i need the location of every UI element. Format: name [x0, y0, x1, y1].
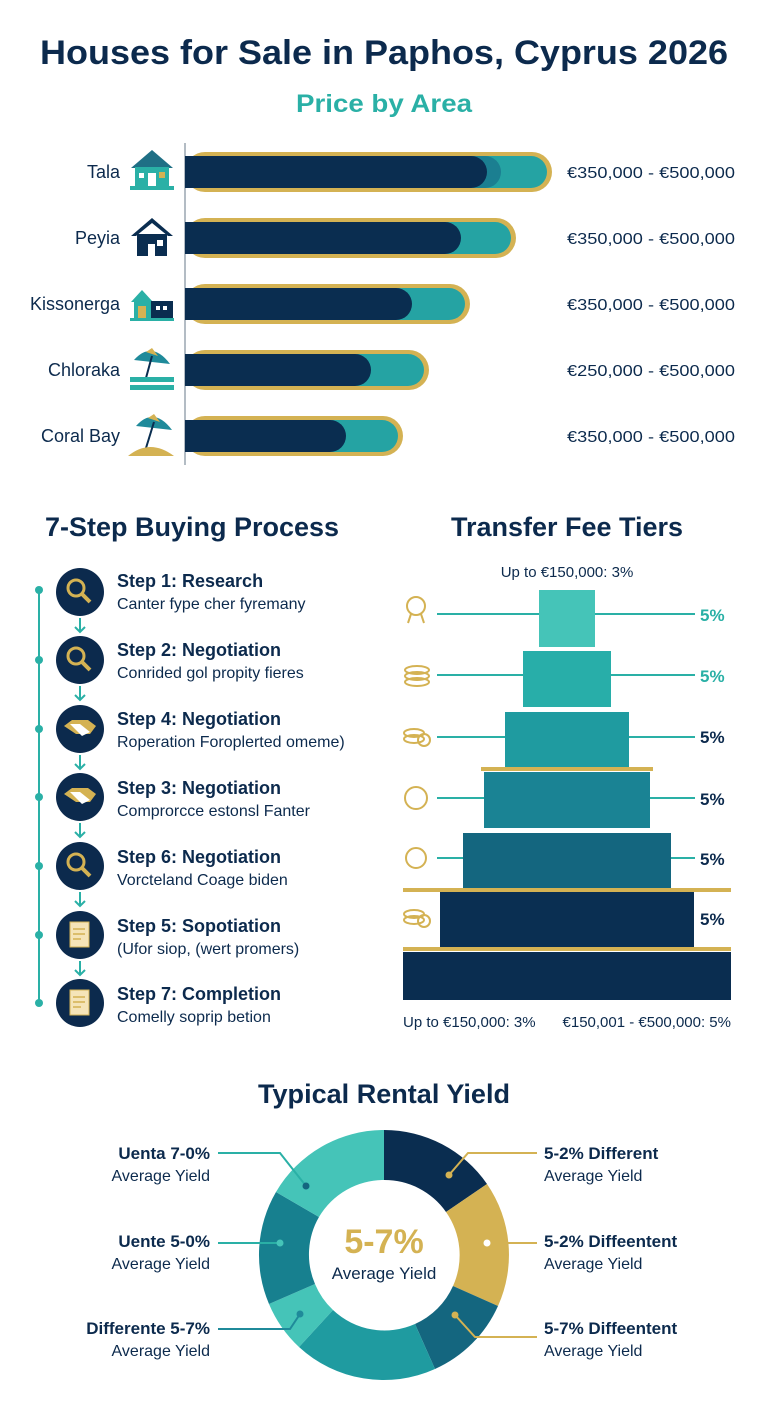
step 2: Conrided gol propity fieres	[117, 665, 304, 682]
heading: typical rental yield: Typical Rental Yield	[258, 1079, 510, 1109]
callouts: yield labels: Uente 5-0%	[118, 1232, 210, 1251]
title: Houses for Sale in Paphos, Cyprus 2026	[40, 34, 728, 72]
panel: transfer fee pyramid	[403, 564, 731, 1031]
callouts: yield labels: Average Yield	[544, 1168, 642, 1185]
bar: Peyia: €350,000 - €500,000	[567, 231, 735, 248]
panel: transfer fee pyramid: 5%	[700, 728, 725, 747]
step 3: Comprorcce estonsl Fanter	[117, 803, 311, 820]
step 4: Roperation Foroplerted omeme)	[117, 734, 345, 751]
step 7: Comelly soprip betion	[117, 1009, 271, 1026]
bar: Peyia	[75, 218, 735, 258]
icon: house Tala	[130, 150, 174, 190]
bar: Kissonerga	[30, 284, 735, 324]
step 2: Step 2: Negotiation	[117, 640, 281, 660]
subtitle: price by area: Price by Area	[296, 90, 473, 118]
step 1	[56, 568, 306, 616]
bar: Peyia: Peyia	[75, 228, 121, 248]
heading: transfer fee tiers: Transfer Fee Tiers	[451, 512, 683, 542]
bar: Coral Bay: €350,000 - €500,000	[567, 429, 735, 446]
panel: transfer fee pyramid: 5%	[700, 910, 725, 929]
callouts: yield labels: 5-7% Diffeentent	[544, 1319, 678, 1338]
step 1: Canter fype cher fyremany	[117, 596, 306, 613]
bar: Coral Bay: Coral Bay	[41, 426, 120, 446]
panel: buying steps	[35, 568, 345, 1027]
step 6	[56, 842, 288, 890]
donut chart: 5-7%	[344, 1223, 424, 1261]
bar: Tala: €350,000 - €500,000	[567, 165, 735, 182]
bar: Tala	[87, 152, 735, 192]
step 6: Vorcteland Coage biden	[117, 872, 288, 889]
callouts: yield labels: 5-2% Diffeentent	[544, 1232, 678, 1251]
step 4	[56, 705, 345, 753]
panel: transfer fee pyramid: 5%	[700, 790, 725, 809]
step 5: Step 5: Sopotiation	[117, 916, 281, 936]
step 7	[56, 979, 281, 1027]
callouts: yield labels: Average Yield	[544, 1256, 642, 1273]
bar: Chloraka: Chloraka	[48, 360, 121, 380]
bar: Chloraka	[48, 350, 735, 390]
panel: transfer fee pyramid: Up to €150,000: 3%	[403, 1014, 536, 1031]
callouts: yield labels: Uenta 7-0%	[118, 1144, 210, 1163]
step 5	[56, 911, 299, 959]
heading: 7-step buying process: 7-Step Buying Process	[45, 512, 339, 542]
step 2	[56, 636, 304, 684]
panel: transfer fee pyramid: 5%	[700, 667, 725, 686]
callouts: yield labels: Average Yield	[112, 1256, 210, 1273]
panel: transfer fee pyramid: 5%	[700, 850, 725, 869]
callouts: yield labels	[86, 1144, 678, 1360]
callouts: yield labels: Differente 5-7%	[86, 1319, 210, 1338]
bar: Tala: Tala	[87, 162, 121, 182]
bar: Kissonerga: €350,000 - €500,000	[567, 297, 735, 314]
step 5: (Ufor siop, (wert promers)	[117, 941, 299, 958]
step 7: Step 7: Completion	[117, 984, 281, 1004]
step 1: Step 1: Research	[117, 571, 263, 591]
icon: house Peyia	[131, 218, 173, 256]
panel: transfer fee pyramid: Up to €150,000: 3%	[501, 564, 633, 581]
step 3	[56, 773, 311, 821]
icon: villa Kissonerga	[130, 290, 174, 321]
donut chart	[259, 1130, 509, 1380]
panel: price by area bar chart	[30, 143, 735, 465]
step 4: Step 4: Negotiation	[117, 709, 281, 729]
panel: transfer fee pyramid: €150,001 - €500,000: 5%	[563, 1014, 731, 1031]
icon: umbrella waves	[130, 348, 174, 390]
icons: coins and medals	[404, 597, 430, 927]
icon: umbrella beach	[128, 414, 174, 456]
panel: transfer fee pyramid: 5%	[700, 606, 725, 625]
step 6: Step 6: Negotiation	[117, 847, 281, 867]
callouts: yield labels: 5-2% Different	[544, 1144, 659, 1163]
bar: Kissonerga: Kissonerga	[30, 294, 121, 314]
bar: Chloraka: €250,000 - €500,000	[567, 363, 735, 380]
callouts: yield labels: Average Yield	[544, 1343, 642, 1360]
step 3: Step 3: Negotiation	[117, 778, 281, 798]
callouts: yield labels: Average Yield	[112, 1343, 210, 1360]
donut chart: Average Yield	[332, 1264, 436, 1283]
bar: Coral Bay	[41, 416, 735, 456]
callouts: yield labels: Average Yield	[112, 1168, 210, 1185]
